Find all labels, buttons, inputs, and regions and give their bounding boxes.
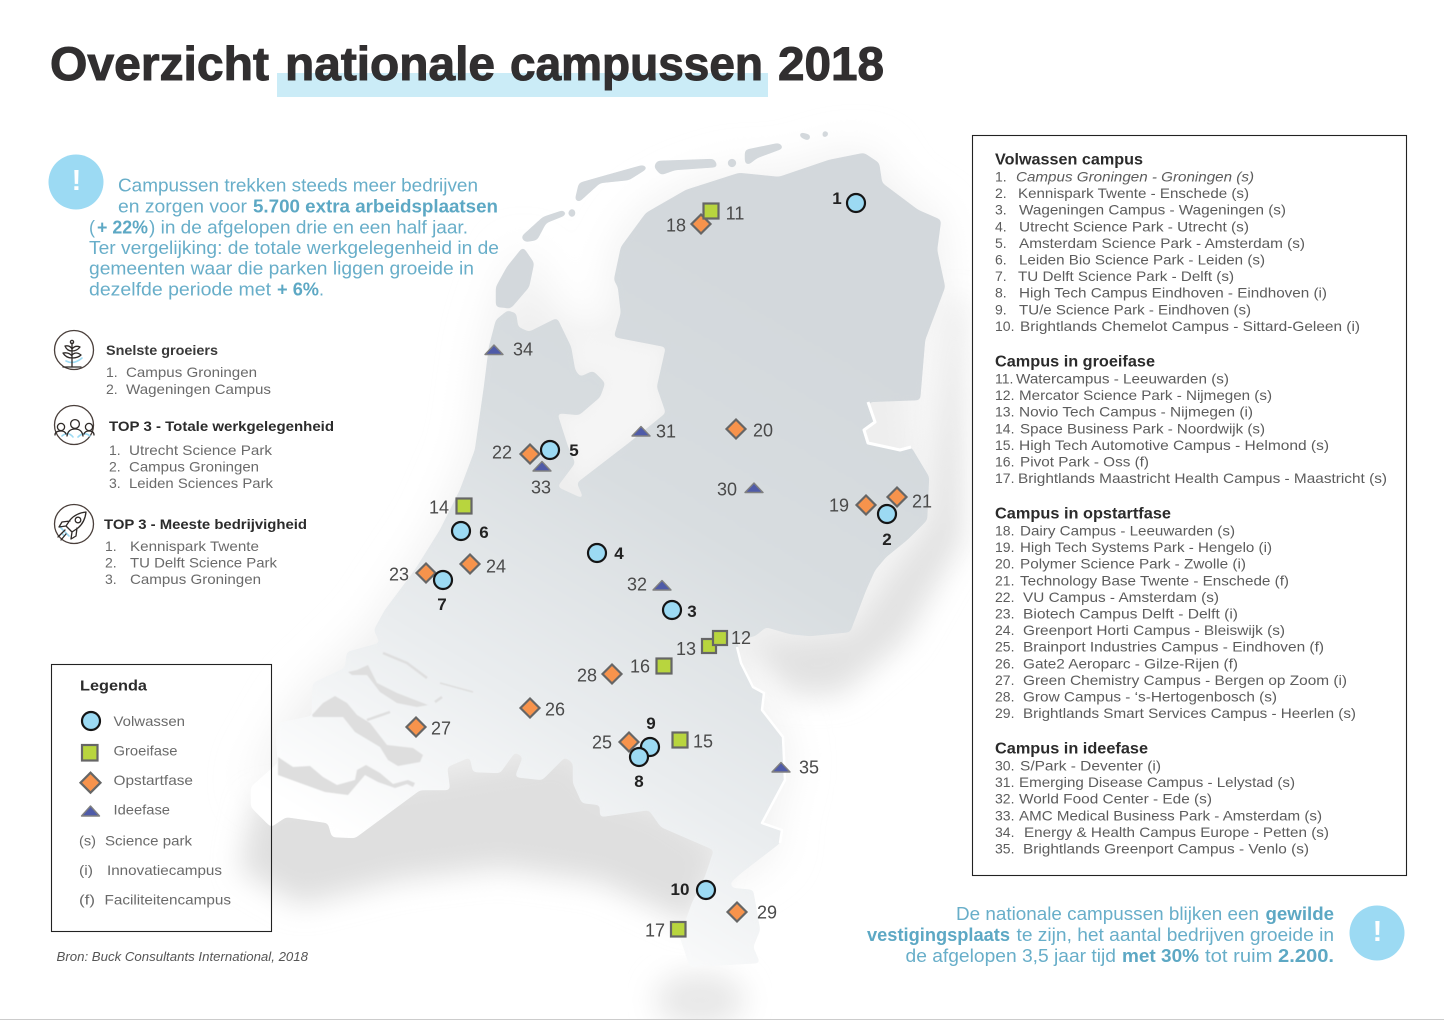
marker 27: 27 [431, 718, 451, 738]
intro text [89, 176, 499, 300]
marker 29 [728, 902, 777, 922]
marker 34: 34 [513, 340, 533, 360]
list: campus in ideefase: 30. [995, 758, 1014, 774]
marker 5: 5 [569, 441, 579, 460]
marker 15: 15 [693, 732, 713, 752]
list: volwassen campus: Wageningen Campus - Wageningen (s) [1019, 202, 1286, 218]
block: top 3 meeste bedrijvigheid: 2. [105, 554, 117, 570]
list: volwassen campus: 1. [995, 168, 1007, 184]
list: campus in opstartfase: 29. [995, 705, 1014, 721]
list: campus in groeifase: Space Business Park - Noordwijk (s) [1020, 420, 1265, 436]
marker 16: 16 [630, 656, 650, 676]
list: volwassen campus: Brightlands Chemelot Campus - Sittard-Geleen (i) [1020, 318, 1360, 334]
block: top 3 meeste bedrijvigheid: TOP 3 - Meeste bedrijvigheid [104, 516, 307, 532]
list: campus in groeifase: 11. [995, 370, 1013, 386]
list: volwassen campus: 10. [995, 318, 1014, 334]
marker 10: 10 [671, 880, 689, 899]
icon: exclamation badge bottom [1350, 906, 1404, 960]
marker 2 [878, 505, 896, 549]
block: top 3 totale werkgelegenheid: 3. [109, 475, 121, 491]
marker 19 [829, 496, 876, 516]
marker 12 [713, 628, 751, 648]
marker 9: 9 [646, 714, 656, 733]
marker 21: 21 [912, 492, 932, 512]
block: top 3 totale werkgelegenheid: Campus Groningen [129, 458, 259, 474]
block: top 3 totale werkgelegenheid: TOP 3 - Totale werkgelegenheid [109, 418, 334, 434]
panel: legend [52, 664, 272, 932]
panel: legend: (f) [79, 892, 95, 908]
marker 25 [592, 732, 638, 752]
icon: plant [54, 330, 94, 370]
map of the Netherlands [240, 130, 962, 1020]
list: campus in opstartfase: 18. [995, 522, 1014, 538]
panel: legend: (s) [79, 832, 96, 848]
list: volwassen campus: Volwassen campus [995, 152, 1143, 168]
bottom callout text [867, 904, 1334, 966]
marker 13: 13 [676, 639, 696, 659]
list: volwassen campus: TU/e Science Park - Eindhoven (s) [1019, 301, 1251, 317]
marker 8 [630, 748, 648, 791]
list: campus in ideefase: S/Park - Deventer (i) [1020, 758, 1161, 774]
list: volwassen campus: Utrecht Science Park - Utrecht (s) [1019, 218, 1249, 234]
marker 27 [406, 718, 451, 738]
list: campus in groeifase: 17. [995, 470, 1014, 486]
intro text: gemeenten waar die parken liggen groeide in [89, 259, 474, 279]
list: volwassen campus: 2. [995, 185, 1007, 201]
list: volwassen campus: Amsterdam Science Park - Amsterdam (s) [1019, 235, 1305, 251]
block: top 3 totale werkgelegenheid: Utrecht Science Park [129, 442, 273, 458]
marker 20 [726, 420, 773, 440]
bottom callout text: te zijn, het aantal bedrijven groeide in [1016, 925, 1334, 945]
list: campus in opstartfase: Grow Campus - ‘s-Hertogenbosch (s) [1023, 688, 1277, 704]
panel: legend: Volwassen [114, 713, 185, 729]
list: campus in opstartfase: 24. [995, 622, 1014, 638]
marker 1: 1 [832, 189, 842, 208]
panel: legend: Legenda [80, 678, 148, 694]
marker 35 [772, 758, 819, 778]
marker 9 [641, 714, 659, 756]
block: snelste groeiers: Wageningen Campus [126, 381, 271, 397]
icon: rocket [54, 504, 94, 544]
list: campus in ideefase: 32. [995, 791, 1014, 807]
marker 33 [531, 462, 551, 498]
list: campus in groeifase: 12. [995, 387, 1014, 403]
marker 8: 8 [634, 772, 644, 791]
title: Overzicht [50, 37, 269, 90]
marker 21 [888, 488, 932, 512]
marker 23: 23 [389, 564, 409, 584]
block: snelste groeiers [106, 342, 271, 397]
bottom callout text: vestigingsplaats [867, 925, 1010, 945]
block: top 3 meeste bedrijvigheid: 1. [105, 538, 117, 554]
list: campus in ideefase: World Food Center - Ede (s) [1019, 791, 1212, 807]
block: snelste groeiers: Campus Groningen [126, 364, 257, 380]
list: campus in opstartfase: 28. [995, 688, 1014, 704]
intro text: Campussen trekken steeds meer bedrijven [118, 176, 478, 196]
marker 30 [717, 480, 763, 500]
list: volwassen campus: 6. [995, 252, 1007, 268]
title highlight [277, 73, 768, 97]
marker 30: 30 [717, 480, 737, 500]
list: campus in opstartfase: Dairy Campus - Leeuwarden (s) [1020, 522, 1235, 538]
list: campus in groeifase: High Tech Automotive Campus - Helmond (s) [1019, 437, 1329, 453]
block: snelste groeiers: 1. [106, 364, 118, 380]
list: campus in opstartfase: 19. [995, 539, 1014, 555]
bottom callout text: De nationale campussen blijken een [956, 904, 1259, 924]
intro text: 5.700 extra arbeidsplaatsen [253, 197, 498, 217]
block: top 3 totale werkgelegenheid: Leiden Sciences Park [129, 475, 274, 491]
intro text: + 22% [97, 218, 148, 238]
marker 22 [492, 442, 540, 464]
title [50, 37, 884, 90]
list: volwassen campus: Leiden Bio Science Park - Leiden (s) [1019, 252, 1265, 268]
block: top 3 meeste bedrijvigheid: Campus Groningen [130, 571, 261, 587]
list: campus in groeifase: Novio Tech Campus - Nijmegen (i) [1019, 404, 1253, 420]
list: campus in ideefase: Emerging Disease Campus - Lelystad (s) [1019, 774, 1295, 790]
list: campus in groeifase: Mercator Science Park - Nijmegen (s) [1019, 387, 1272, 403]
marker 17: 17 [645, 920, 665, 940]
list: campus in ideefase: Energy & Health Campus Europe - Petten (s) [1024, 824, 1329, 840]
panel: legend: Groeifase [114, 742, 178, 758]
marker 35: 35 [799, 758, 819, 778]
list: campus in opstartfase: Technology Base Twente - Enschede (f) [1020, 572, 1289, 588]
intro text: Ter vergelijking: de totale werkgelegenheid in de [89, 238, 499, 258]
list: campus in groeifase: Brightlands Maastricht Health Campus - Maastricht (s) [1018, 470, 1387, 486]
marker 14: 14 [429, 498, 449, 518]
title: nationale [285, 37, 495, 90]
marker 20: 20 [753, 420, 773, 440]
marker 5 [541, 441, 579, 460]
list: campus in opstartfase: 22. [995, 589, 1014, 605]
marker 2: 2 [882, 530, 892, 549]
intro text: en zorgen voor [118, 197, 247, 217]
list: campus in ideefase: AMC Medical Business Park - Amsterdam (s) [1019, 807, 1322, 823]
marker 7 [434, 571, 452, 614]
marker 1 [832, 189, 865, 212]
list: volwassen campus: TU Delft Science Park - Delft (s) [1018, 268, 1234, 284]
list: campus in opstartfase: Green Chemistry Campus - Bergen op Zoom (i) [1023, 672, 1347, 688]
bottom callout text: met 30% [1122, 946, 1199, 966]
list: volwassen campus [995, 152, 1360, 334]
block: snelste groeiers: Snelste groeiers [106, 342, 218, 358]
marker 32: 32 [627, 574, 647, 594]
source: Bron: Buck Consultants International, 2018 [56, 949, 309, 964]
marker 15 [672, 732, 713, 752]
marker 32 [627, 574, 671, 594]
intro text: + 6% [277, 280, 319, 300]
panel: legend: Faciliteitencampus [104, 892, 231, 908]
list: campus in opstartfase: Greenport Horti Campus - Bleiswijk (s) [1023, 622, 1285, 638]
marker 23 [389, 564, 436, 584]
bottom callout text: de afgelopen 3,5 jaar tijd [906, 946, 1116, 966]
marker 7: 7 [437, 595, 447, 614]
list: campus in ideefase: Brightlands Greenport Campus - Venlo (s) [1023, 840, 1309, 856]
panel: legend: Ideefase [114, 802, 170, 818]
list: campus in ideefase: 35. [995, 840, 1014, 856]
list: volwassen campus: 5. [995, 235, 1007, 251]
list: campus in opstartfase: VU Campus - Amsterdam (s) [1023, 589, 1219, 605]
marker 26: 26 [545, 700, 565, 720]
marker 31 [632, 422, 676, 442]
panel: campus list [972, 136, 1406, 876]
list: volwassen campus: 7. [995, 268, 1007, 284]
block: top 3 totale werkgelegenheid [109, 418, 334, 491]
list: campus in groeifase: Campus in groeifase [995, 354, 1155, 370]
block: top 3 meeste bedrijvigheid: TU Delft Science Park [130, 554, 278, 570]
list: campus in opstartfase: Campus in opstartfase [995, 506, 1171, 522]
marker 22: 22 [492, 442, 512, 462]
icon: people [54, 406, 94, 444]
marker 33: 33 [531, 478, 551, 498]
list: volwassen campus: 9. [995, 301, 1007, 317]
marker 31: 31 [656, 422, 676, 442]
list: campus in groeifase: 13. [995, 404, 1014, 420]
marker 4: 4 [614, 544, 624, 563]
bottom callout text: 2.200. [1278, 946, 1334, 966]
intro text: dezelfde periode met [89, 280, 271, 300]
list: campus in ideefase: 31. [995, 774, 1014, 790]
marker 13 [676, 639, 716, 659]
block: top 3 meeste bedrijvigheid: Kennispark Twente [130, 538, 259, 554]
list: volwassen campus: 8. [995, 285, 1007, 301]
list: volwassen campus: Kennispark Twente - Enschede (s) [1018, 185, 1249, 201]
marker 28 [577, 664, 622, 686]
intro text: ( [89, 218, 95, 238]
marker 6 [452, 522, 489, 542]
marker 28: 28 [577, 666, 597, 686]
list: volwassen campus: Campus Groningen - Groningen (s) [1016, 168, 1254, 184]
map: zeeland waterways [278, 653, 473, 795]
marker 25: 25 [592, 732, 612, 752]
marker 12: 12 [731, 628, 751, 648]
icon: exclamation badge bottom: ! [1373, 916, 1382, 948]
list: volwassen campus: 3. [995, 202, 1007, 218]
bottom callout text: gewilde [1266, 904, 1334, 924]
marker 24 [460, 554, 506, 576]
list: campus in ideefase: Campus in ideefase [995, 740, 1148, 758]
marker 16 [630, 656, 672, 676]
list: campus in opstartfase: Brightlands Smart Services Campus - Heerlen (s) [1023, 705, 1356, 721]
marker 6: 6 [479, 523, 489, 542]
panel: legend: (i) [79, 862, 93, 878]
bottom callout text: tot ruim [1205, 946, 1272, 966]
map markers [389, 189, 932, 940]
title: 2018 [778, 37, 884, 90]
list: campus in groeifase: Pivot Park - Oss (f) [1020, 454, 1149, 470]
block: snelste groeiers: 2. [106, 381, 118, 397]
icon: exclamation badge top: ! [72, 165, 81, 197]
marker 19: 19 [829, 496, 849, 516]
list: campus in groeifase: 16. [995, 454, 1014, 470]
list: campus in opstartfase: Biotech Campus Delft - Delft (i) [1023, 606, 1238, 622]
marker 29: 29 [757, 902, 777, 922]
marker 14 [429, 498, 472, 518]
list: campus in opstartfase: 23. [995, 606, 1014, 622]
map: land and wadden islands [251, 130, 945, 967]
marker 26 [520, 698, 565, 720]
list: campus in ideefase: 34. [995, 824, 1014, 840]
list: campus in opstartfase: 21. [995, 572, 1014, 588]
intro text: ) in de afgelopen drie en een half jaar. [149, 218, 468, 238]
marker 3 [663, 601, 697, 621]
block: top 3 totale werkgelegenheid: 2. [109, 458, 121, 474]
panel: legend: Science park [105, 832, 193, 848]
list: campus in groeifase [995, 354, 1387, 486]
marker 24: 24 [486, 556, 506, 576]
marker 4 [588, 544, 624, 563]
marker 34 [485, 340, 533, 360]
intro text: . [319, 280, 324, 300]
list: campus in opstartfase: 26. [995, 655, 1014, 671]
list: campus in opstartfase: Polymer Science Park - Zwolle (i) [1020, 556, 1246, 572]
marker 11: 11 [726, 204, 744, 224]
list: campus in ideefase [995, 740, 1329, 856]
block: top 3 totale werkgelegenheid: 1. [109, 442, 121, 458]
marker 10 [671, 880, 715, 899]
list: campus in opstartfase [995, 506, 1356, 721]
list: campus in ideefase: 33. [995, 807, 1014, 823]
icon: exclamation badge top [48, 154, 104, 210]
block: top 3 meeste bedrijvigheid: 3. [105, 571, 117, 587]
list: campus in groeifase: Watercampus - Leeuwarden (s) [1016, 370, 1229, 386]
list: volwassen campus: 4. [995, 218, 1007, 234]
marker 11 [704, 204, 744, 224]
marker 18 [666, 214, 710, 236]
list: campus in opstartfase: Gate2 Aeroparc - Gilze-Rijen (f) [1023, 655, 1238, 671]
list: volwassen campus: High Tech Campus Eindhoven - Eindhoven (i) [1019, 285, 1327, 301]
panel: legend: Opstartfase [114, 772, 193, 788]
list: campus in groeifase: 14. [995, 420, 1014, 436]
marker 18: 18 [666, 216, 686, 236]
panel: legend: Innovatiecampus [107, 862, 222, 878]
list: campus in opstartfase: 27. [995, 672, 1014, 688]
list: campus in opstartfase: 25. [995, 639, 1014, 655]
list: campus in opstartfase: Brainport Industries Campus - Eindhoven (f) [1023, 639, 1324, 655]
list: campus in groeifase: 15. [995, 437, 1014, 453]
list: campus in opstartfase: High Tech Systems Park - Hengelo (i) [1020, 539, 1272, 555]
title: campussen [510, 37, 763, 90]
marker 3: 3 [687, 602, 697, 621]
marker 17 [645, 920, 686, 940]
list: campus in opstartfase: 20. [995, 556, 1014, 572]
block: top 3 meeste bedrijvigheid [104, 516, 307, 587]
